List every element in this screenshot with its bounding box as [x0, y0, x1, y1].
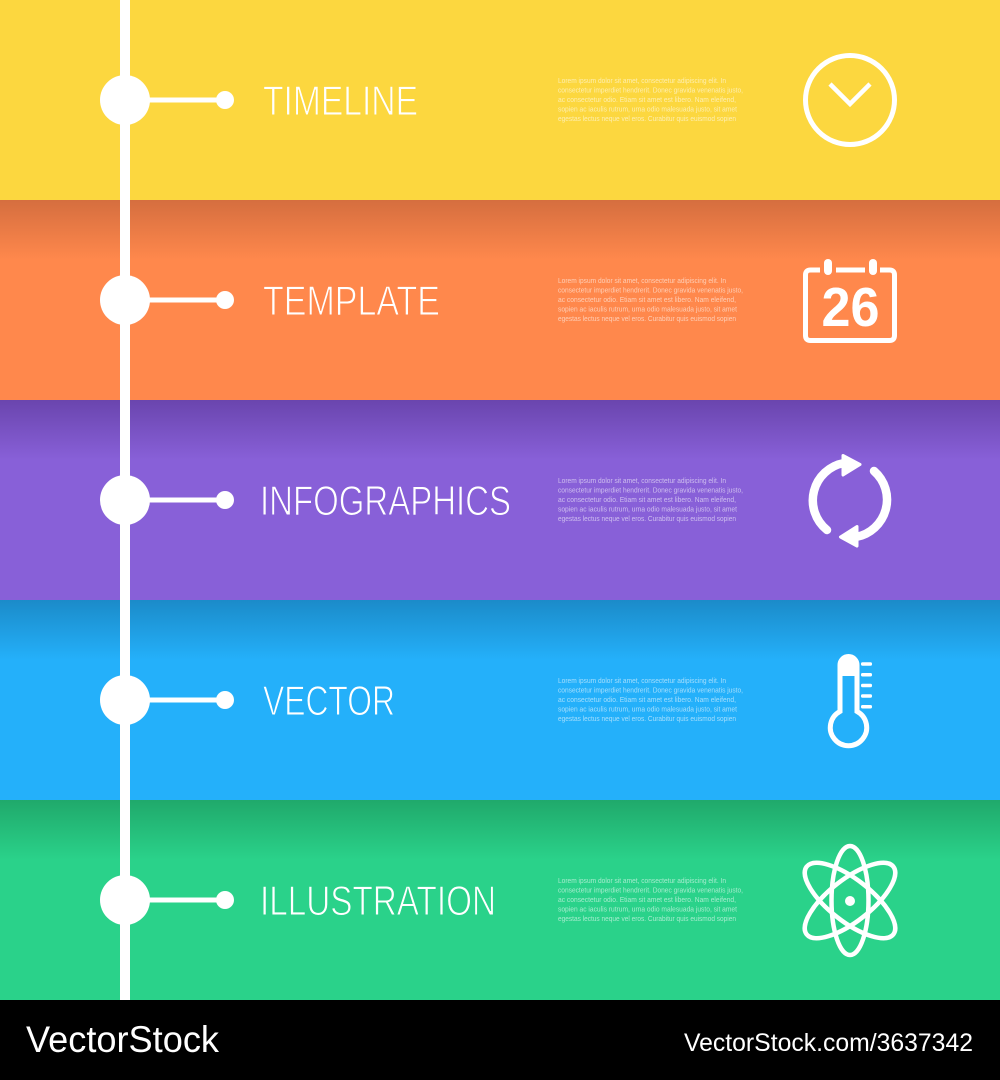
timeline vertical line — [120, 0, 130, 1000]
heading: VECTOR: VECTOR — [263, 677, 395, 724]
text block 1: consectetur imperdiet hendrerit. Donec gravida venenatis justo, — [558, 86, 743, 95]
heading: TIMELINE: TIMELINE — [263, 77, 418, 124]
footer id: VectorStock.com/3637342: VectorStock.com/3637342 — [684, 1029, 973, 1057]
text block 2: consectetur imperdiet hendrerit. Donec gravida venenatis justo, — [558, 286, 743, 295]
panel: template band — [0, 200, 1000, 400]
timeline node 2 — [100, 275, 234, 325]
text block 4: Lorem ipsum dolor sit amet, consectetur adipiscing elit. In — [558, 676, 726, 685]
text block 2 — [558, 276, 743, 323]
text block 4: consectetur imperdiet hendrerit. Donec gravida venenatis justo, — [558, 686, 743, 695]
text block 1: ac consectetur odio. Etiam sit amet est libero. Nam eleifend, — [558, 95, 736, 104]
timeline node 5 — [100, 875, 234, 925]
icon: atom — [794, 846, 906, 955]
text block 3: egestas lectus neque vel eros. Curabitur quis euismod sopien — [558, 514, 736, 523]
text block 2: egestas lectus neque vel eros. Curabitur quis euismod sopien — [558, 314, 736, 323]
footer bar — [0, 1000, 1000, 1080]
heading: INFOGRAPHICS: INFOGRAPHICS — [260, 477, 511, 524]
text block 5: consectetur imperdiet hendrerit. Donec gravida venenatis justo, — [558, 886, 743, 895]
text block 4 — [558, 676, 743, 723]
text block 5 — [558, 876, 743, 923]
text block 4: sopien ac iaculis rutrum, urna odio malesuada justo, sit amet — [558, 704, 738, 713]
text block 5: Lorem ipsum dolor sit amet, consectetur adipiscing elit. In — [558, 876, 726, 885]
footer logo: VectorStock: VectorStock — [26, 1019, 219, 1060]
timeline node 4 — [100, 675, 234, 725]
text block 1: sopien ac iaculis rutrum, urna odio malesuada justo, sit amet — [558, 104, 738, 113]
icon: clock chevron — [806, 56, 894, 144]
heading: ILLUSTRATION: ILLUSTRATION — [260, 877, 496, 924]
icon: thermometer — [830, 654, 872, 746]
text block 3: sopien ac iaculis rutrum, urna odio malesuada justo, sit amet — [558, 504, 738, 513]
panel: timeline band — [0, 0, 1000, 200]
timeline node 1 — [100, 75, 234, 125]
text block 4: egestas lectus neque vel eros. Curabitur quis euismod sopien — [558, 714, 736, 723]
text block 3: Lorem ipsum dolor sit amet, consectetur adipiscing elit. In — [558, 476, 726, 485]
panel: illustration band — [0, 800, 1000, 1000]
icon: calendar 26: 26 — [822, 276, 880, 338]
text block 1: Lorem ipsum dolor sit amet, consectetur adipiscing elit. In — [558, 76, 726, 85]
icon: refresh arrows — [813, 456, 887, 546]
heading: TEMPLATE: TEMPLATE — [263, 277, 440, 324]
text block 2: Lorem ipsum dolor sit amet, consectetur adipiscing elit. In — [558, 276, 726, 285]
text block 3: consectetur imperdiet hendrerit. Donec gravida venenatis justo, — [558, 486, 743, 495]
text block 2: ac consectetur odio. Etiam sit amet est libero. Nam eleifend, — [558, 295, 736, 304]
text block 4: ac consectetur odio. Etiam sit amet est libero. Nam eleifend, — [558, 695, 736, 704]
panel: vector band — [0, 600, 1000, 800]
text block 3: ac consectetur odio. Etiam sit amet est libero. Nam eleifend, — [558, 495, 736, 504]
panel: infographics band — [0, 400, 1000, 600]
text block 5: egestas lectus neque vel eros. Curabitur quis euismod sopien — [558, 914, 736, 923]
text block 2: sopien ac iaculis rutrum, urna odio malesuada justo, sit amet — [558, 304, 738, 313]
icon: calendar 26 — [806, 263, 894, 340]
text block 3 — [558, 476, 743, 523]
text block 5: sopien ac iaculis rutrum, urna odio malesuada justo, sit amet — [558, 904, 738, 913]
text block 1: egestas lectus neque vel eros. Curabitur quis euismod sopien — [558, 114, 736, 123]
timeline node 3 — [100, 475, 234, 525]
text block 5: ac consectetur odio. Etiam sit amet est libero. Nam eleifend, — [558, 895, 736, 904]
text block 1 — [558, 76, 743, 123]
